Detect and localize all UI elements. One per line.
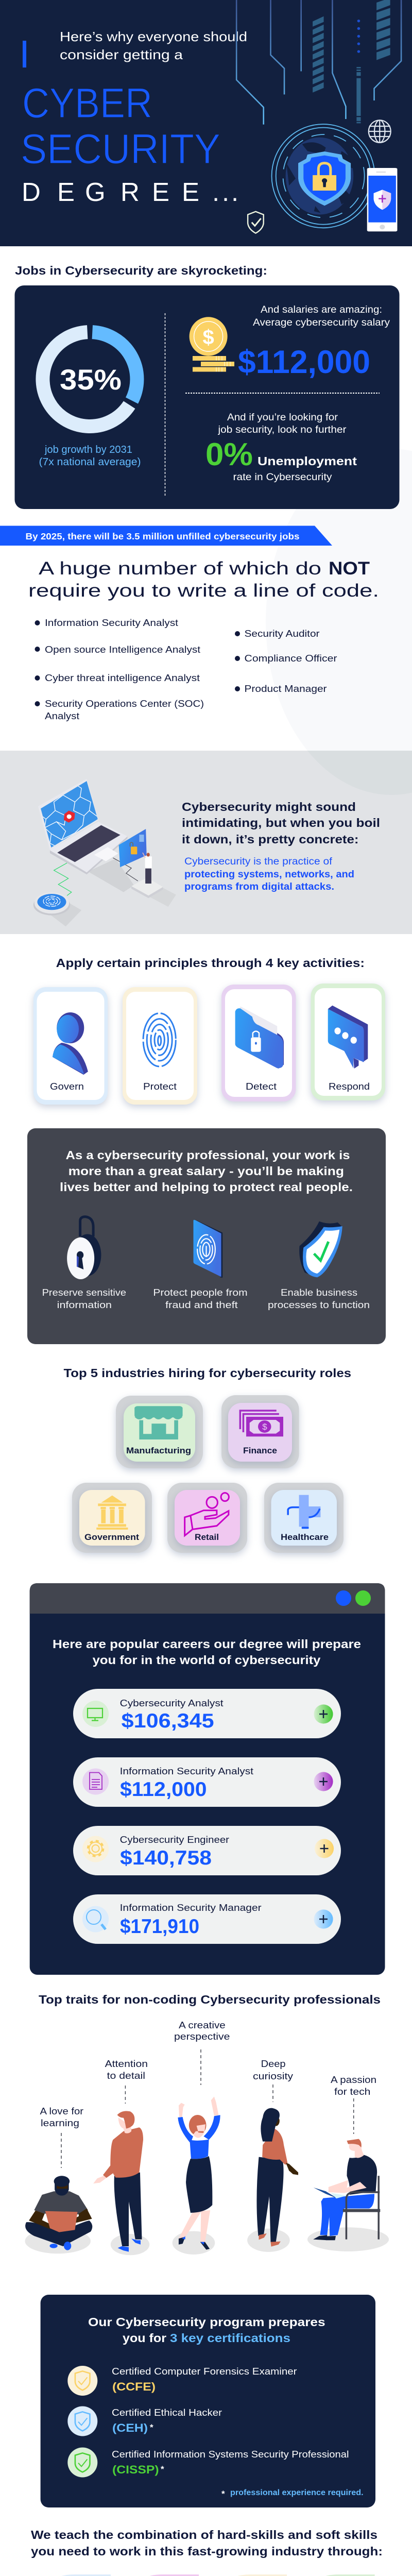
icon: bank building [96, 1496, 128, 1530]
list: non coding jobs left: Open source Intelligence Analyst [45, 645, 200, 655]
career title: Information Security Analyst [120, 1766, 253, 1776]
definition text: programs from digital attacks. [184, 881, 334, 892]
trait: passion for tech: A passion [331, 2075, 376, 2085]
title: DEGREE... [22, 177, 238, 207]
label: finance: Finance [243, 1446, 277, 1455]
icon: coin stack: $ [202, 326, 214, 349]
footnote: professional experience required. [230, 2488, 364, 2497]
career salary: $106,345 [122, 1710, 214, 1732]
list: non coding jobs right: Product Manager [244, 684, 327, 694]
icon: blue shield [75, 2412, 90, 2431]
trait: deep curiosity: curiosity [253, 2071, 293, 2081]
label: enable [268, 1287, 370, 1310]
card: respond [311, 984, 385, 1100]
icon: padlock [67, 1217, 101, 1279]
panel heading [88, 2315, 325, 2345]
heading: hard and soft skills: you need to work in this fast-growing industry through: [31, 2545, 383, 2558]
unemployment caption [217, 412, 347, 435]
cert: CCFE [67, 2366, 297, 2396]
label: retail: Retail [195, 1532, 219, 1542]
donut chart 35 percent [43, 332, 137, 426]
headline: do not require code [28, 558, 379, 601]
icon: banknotes [240, 1411, 283, 1436]
label: government: Government [84, 1532, 139, 1542]
label: healthcare: Healthcare [281, 1532, 329, 1542]
intro text: Here’s why everyone should [60, 29, 247, 44]
career: information security analyst [73, 1757, 341, 1807]
unemployment caption: job security, look no further [217, 424, 347, 435]
list: non coding jobs right: Compliance Officer [244, 653, 337, 664]
card: detect [221, 985, 296, 1101]
trait: creative perspective: perspective [174, 2031, 230, 2042]
icon: shield with padlock and rings [272, 124, 375, 228]
trait: deep curiosity [247, 2059, 298, 2252]
trait: passion for tech: for tech [334, 2087, 370, 2097]
icon: coin stack [190, 317, 234, 372]
trait: attention to detail: Attention [105, 2059, 148, 2069]
cert: CISSP [67, 2447, 349, 2477]
footnote: * [221, 2489, 225, 2499]
salary caption: And salaries are amazing: [261, 304, 382, 315]
ribbon: unfilled jobs: By 2025, there will be 3.5 million unfilled cybersecurity jobs [26, 531, 300, 541]
panel heading: lives better and helping to protect real people. [60, 1180, 353, 1194]
career salary: $112,000 [120, 1778, 207, 1801]
card: protect [123, 987, 197, 1105]
headline: do not require code: require you to write a line of code. [28, 581, 379, 601]
trait: creative perspective [173, 2020, 230, 2255]
list: non coding jobs right [235, 629, 337, 694]
icon: fingerprint card [194, 1219, 222, 1278]
icon: chat bubble [328, 1006, 368, 1069]
trait: love for learning: learning [41, 2118, 79, 2128]
icon: folder with lock [235, 1006, 284, 1069]
card: manufacturing [116, 1396, 203, 1468]
definition heading: Cybersecurity might sound [182, 800, 356, 814]
heading: hard and soft skills: We teach the combination of hard-skills and soft skills [31, 2528, 377, 2541]
unemployment value: 0% [205, 437, 253, 472]
intro text: consider getting a [60, 47, 183, 62]
ribbon: unfilled jobs [0, 526, 332, 546]
definition heading: it down, it’s pretty concrete: [182, 833, 358, 846]
headline: do not require code: A huge number of which do [39, 558, 321, 579]
label: govern: Govern [50, 1081, 84, 1092]
unemployment note: rate in Cybersecurity [233, 471, 332, 483]
icon: globe small [369, 120, 391, 143]
tile: industry experts [303, 2574, 375, 2576]
label: protect: Protect [143, 1081, 177, 1092]
background ellipse [266, 449, 412, 795]
icon: shield check [299, 1222, 342, 1277]
label: preserve: information [57, 1299, 112, 1310]
label: preserve: Preserve sensitive [42, 1287, 126, 1298]
list: non coding jobs left: Information Security Analyst [45, 618, 178, 628]
icon: small shield check [248, 212, 264, 233]
title [21, 80, 238, 207]
cert name: Certified Computer Forensics Examiner [112, 2366, 297, 2377]
career salary: $171,910 [120, 1916, 199, 1938]
careers heading [53, 1637, 361, 1667]
definition heading [182, 800, 380, 846]
salary value: $112,000 [238, 344, 370, 380]
career salary: $140,758 [120, 1847, 212, 1869]
definition text: Cybersecurity is the practice of [184, 856, 333, 867]
unemployment caption: And if you’re looking for [227, 412, 338, 423]
cert code: (CISSP) [112, 2463, 159, 2476]
illustration: laptop with security [33, 779, 176, 926]
card: govern [33, 987, 108, 1105]
trait: passion for tech [307, 2075, 389, 2251]
list: non coding jobs right: Security Auditor [244, 629, 320, 639]
panel heading: Our Cybersecurity program prepares [88, 2315, 325, 2329]
icon: monitor [88, 1708, 102, 1721]
heading: four activities: Apply certain principles through 4 key activities: [56, 956, 365, 970]
figure: sitting man [25, 2176, 92, 2253]
panel: jobs stats [14, 285, 400, 509]
accent bar [23, 41, 26, 67]
salary caption [253, 304, 390, 328]
header banner [0, 0, 412, 246]
cert name: Certified Ethical Hacker [112, 2407, 222, 2418]
icon: green shield [75, 2453, 90, 2472]
label: protect people: fraud and theft [165, 1299, 238, 1310]
trait: creative perspective: A creative [179, 2020, 226, 2030]
donut caption [39, 444, 141, 468]
label: protect people [153, 1287, 248, 1310]
trait: deep curiosity: Deep [261, 2059, 286, 2069]
list: non coding jobs left [35, 618, 204, 721]
panel heading: 3 key certifications [170, 2331, 290, 2345]
label: respond: Respond [329, 1081, 370, 1092]
figure: man on chair [307, 2139, 389, 2251]
label: detect: Detect [246, 1081, 277, 1092]
icon: yellow shield [75, 2371, 90, 2390]
icon: fingerprint [143, 1013, 176, 1066]
cert code: (CEH) [112, 2421, 148, 2434]
tile: discussions [39, 2574, 111, 2576]
careers heading: Here are popular careers our degree will prepare [53, 1637, 361, 1651]
icon: magnifier [87, 1910, 106, 1929]
career: cybersecurity analyst [73, 1689, 341, 1738]
title: CYBER [22, 80, 152, 127]
asterisk: * [161, 2464, 164, 2474]
tile: real world [215, 2574, 287, 2576]
hatch strips and dots [313, 0, 390, 123]
card: finance [221, 1395, 299, 1468]
icon: document [90, 1772, 102, 1789]
tile: projects [128, 2574, 199, 2576]
salary caption: Average cybersecurity salary [253, 317, 390, 328]
list: non coding jobs left: Security Operations Center (SOC) [45, 699, 204, 709]
career title: Cybersecurity Analyst [120, 1698, 224, 1708]
label: enable: processes to function [268, 1299, 370, 1310]
donut caption: job growth by 2031 [44, 444, 132, 455]
icon: gear [88, 1841, 104, 1856]
heading: hard and soft skills [31, 2528, 383, 2558]
panel heading [60, 1148, 353, 1194]
label: protect people: Protect people from [153, 1287, 248, 1298]
dollar sign: $ [262, 1422, 267, 1432]
icon: storefront [134, 1406, 183, 1439]
career title: Cybersecurity Engineer [120, 1834, 229, 1845]
card: government [72, 1483, 152, 1553]
figure: woman arms raised [173, 2096, 220, 2255]
heading: top industries: Top 5 industries hiring for cybersecurity roles [64, 1366, 351, 1380]
definition text: protecting systems, networks, and [184, 869, 354, 880]
icon: hand with coins [185, 1493, 229, 1536]
figure: woman from behind [247, 2108, 298, 2252]
list: non coding jobs left: Analyst [45, 711, 79, 721]
career: information security manager [73, 1894, 341, 1944]
panel heading: more than a great salary - you’ll be making [68, 1164, 344, 1178]
donut caption: (7x national average) [39, 456, 141, 468]
panel: certifications [41, 2295, 375, 2507]
title: SECURITY [21, 126, 220, 173]
panel heading: As a cybersecurity professional, your work is [66, 1148, 350, 1162]
trait: attention to detail [93, 2059, 149, 2255]
window dots [336, 1590, 371, 1606]
label: preserve [42, 1287, 126, 1310]
card: healthcare [264, 1483, 344, 1553]
figure: standing man [93, 2111, 149, 2255]
panel: real people [27, 1128, 386, 1344]
trait: love for learning [25, 2106, 92, 2253]
trait: love for learning: A love for [40, 2106, 83, 2116]
intro text [60, 29, 247, 62]
panel: careers [30, 1583, 385, 1975]
label: enable: Enable business [281, 1287, 357, 1298]
career title: Information Security Manager [120, 1902, 262, 1913]
heading: top traits: Top traits for non-coding Cybersecurity professionals [39, 1993, 381, 2006]
cert name: Certified Information Systems Security Professional [112, 2449, 349, 2460]
label: manufacturing: Manufacturing [126, 1446, 191, 1455]
career: cybersecurity engineer [73, 1826, 341, 1875]
donut value: 35% [60, 363, 122, 396]
cert: CEH [67, 2406, 222, 2436]
list: non coding jobs left: Cyber threat intelligence Analyst [45, 673, 200, 683]
trait: attention to detail: to detail [107, 2071, 145, 2081]
asterisk: * [150, 2422, 153, 2432]
cert code: (CCFE) [112, 2380, 156, 2393]
circuit lines [236, 0, 401, 125]
icon: medical cross [288, 1495, 320, 1529]
definition heading: intimidating, but when you boil [182, 816, 380, 829]
panel heading: you for [123, 2331, 166, 2345]
careers heading: you for in the world of cybersecurity [93, 1653, 320, 1667]
icon: person [53, 1012, 88, 1075]
heading: jobs: Jobs in Cybersecurity are skyrocketing: [15, 264, 267, 277]
card: retail [167, 1483, 247, 1553]
icon: phone [367, 168, 397, 231]
unemployment label: Unemployment [258, 454, 357, 468]
panel: definition band [0, 751, 412, 934]
headline: do not require code: NOT [329, 558, 370, 579]
definition text [184, 856, 354, 892]
